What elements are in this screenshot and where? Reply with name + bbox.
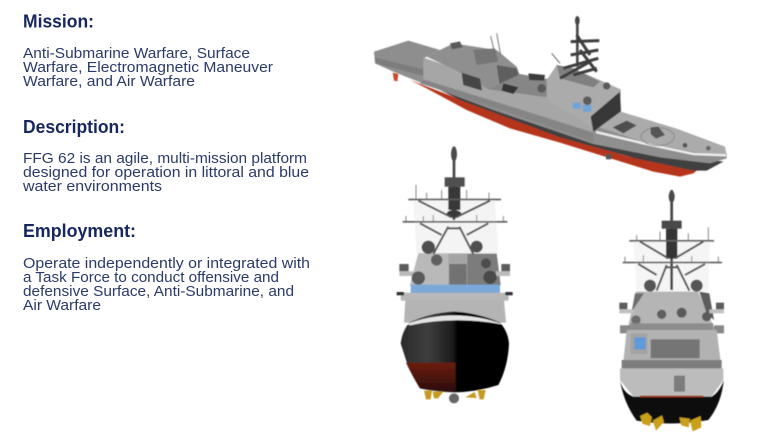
text block: mission: Warfare, Electromagnetic Maneuver — [23, 60, 273, 76]
text block: employment: Operate independently or integrated with — [23, 256, 310, 272]
text block: description — [22, 151, 309, 195]
text block: description: water environments — [22, 179, 162, 195]
text block: mission: Anti-Submarine Warfare, Surface — [23, 46, 250, 62]
ship illustration: stern view — [619, 190, 724, 431]
text block: mission — [23, 46, 273, 90]
text block: description: designed for operation in littoral and blue — [23, 165, 309, 181]
text block: employment: a Task Force to conduct offensive and — [23, 270, 279, 286]
text block: description: FFG 62 is an agile, multi-mission platform — [23, 151, 307, 167]
heading: Mission: Mission: — [23, 12, 94, 32]
text column — [22, 12, 310, 314]
heading: Description: Description: — [23, 117, 125, 137]
text block: employment — [23, 256, 310, 314]
text block: mission: Warfare, and Air Warfare — [23, 74, 195, 90]
heading: Employment: Employment: — [23, 221, 136, 241]
text block: employment: defensive Surface, Anti-Submarine, and — [23, 284, 294, 300]
text block: employment: Air Warfare — [23, 298, 101, 314]
ship illustration: bow view — [397, 147, 513, 403]
ship illustration: three-quarter view — [374, 16, 727, 177]
